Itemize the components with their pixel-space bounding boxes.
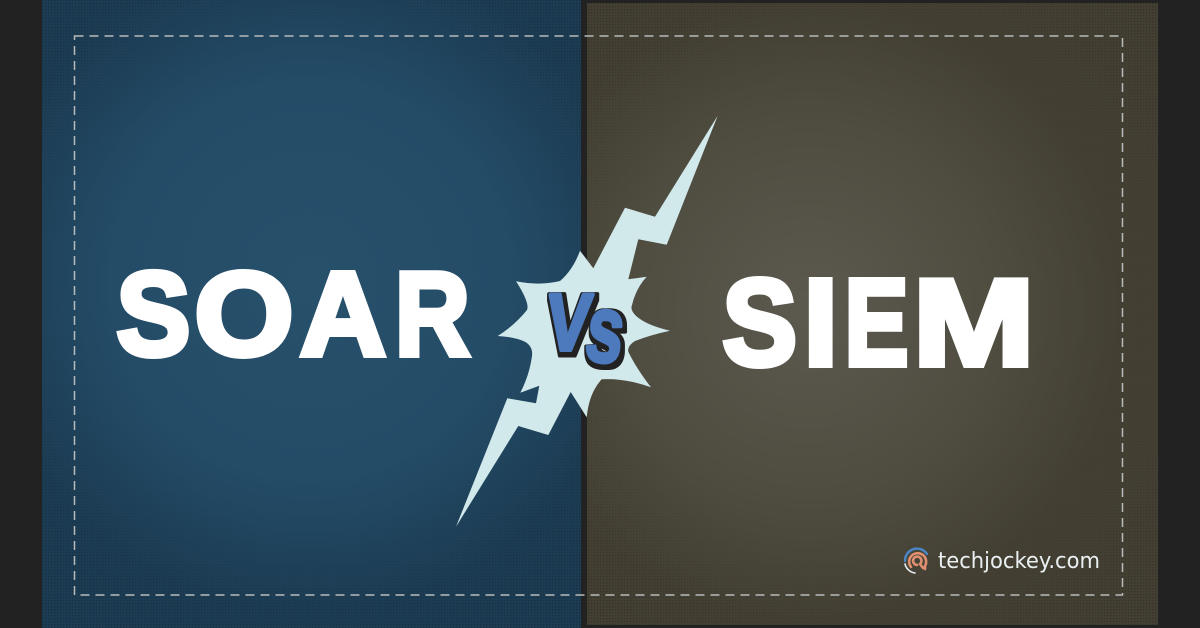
heading: SOAR <box>116 247 470 381</box>
heading: SOAR: S <box>116 248 190 381</box>
VS badge letter V: V <box>542 277 595 367</box>
heading: SOAR: R <box>395 247 470 381</box>
logo: techjockey <box>905 548 1100 574</box>
heading: SIEM: I <box>804 255 838 392</box>
logo icon <box>905 549 927 573</box>
heading: SIEM: M <box>913 254 1035 391</box>
panel: SOAR blue background <box>42 0 581 628</box>
logo wordmark: techjockey.com <box>938 548 1100 574</box>
panel: SIEM olive background <box>587 3 1158 625</box>
VS badge letter S: s <box>580 275 631 385</box>
heading: SIEM <box>722 254 1035 392</box>
heading: SIEM: S <box>722 254 797 391</box>
icon: VS badge <box>542 275 631 385</box>
icon: lightning burst <box>456 116 718 527</box>
dashed frame <box>74 36 1122 595</box>
heading: SOAR: A <box>300 248 386 381</box>
heading: SIEM: E <box>844 255 908 392</box>
heading: SOAR: O <box>194 248 294 381</box>
